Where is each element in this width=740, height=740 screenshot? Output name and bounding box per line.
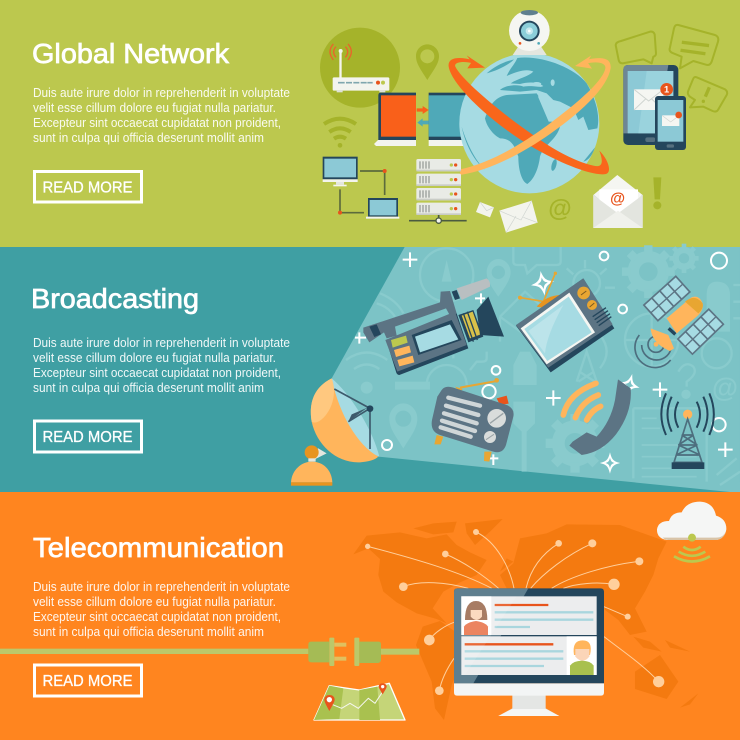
icon: satellite (635, 275, 725, 368)
avatar: man (570, 640, 594, 675)
map dots (365, 529, 664, 695)
illustration: broadcasting icons (291, 244, 740, 493)
text block: telecommunication description (33, 580, 290, 639)
icon: teal laptop (429, 93, 470, 146)
illustration: telecommunication icons (0, 502, 726, 720)
background pattern icons: @ (712, 373, 738, 403)
button: read more: READ MORE (42, 429, 132, 446)
icon: satellite dish (291, 378, 379, 486)
icon: orange laptop (374, 93, 416, 146)
icon: globe (459, 53, 599, 193)
icon: radio (432, 378, 514, 462)
icon: tablet with message (623, 65, 678, 145)
icon: webcam (509, 10, 550, 55)
heading: Broadcasting: Broadcasting (31, 283, 199, 314)
panel: broadcasting (0, 244, 740, 493)
arrow: orange orbit (449, 55, 609, 174)
decoration: plus marks and rings (355, 252, 733, 465)
text block: broadcasting description (33, 336, 290, 395)
text block: global network description: sunt in culpa qui officia deserunt mollit anim (33, 131, 264, 145)
arrow: laptop to laptop (417, 106, 429, 114)
background pattern icons (346, 244, 740, 485)
text block: broadcasting description: velit esse cillum dolore eu fugiat nulla pariatur. (33, 351, 276, 365)
text block: telecommunication description: sunt in culpa qui officia deserunt mollit anim (33, 625, 264, 639)
light beam (332, 247, 740, 493)
icon: cloud with signal (657, 502, 726, 561)
button: read more (34, 421, 142, 452)
text block: broadcasting description: Duis aute irure dolor in reprehenderit in voluptate (33, 336, 290, 350)
icon: at sign: @ (548, 196, 572, 223)
network connection lines (368, 532, 659, 691)
icon: tablet with message: 1 (664, 85, 669, 95)
icon: telephone handset (569, 379, 631, 455)
illustration: global network icons (320, 10, 727, 233)
icon: video camera (363, 278, 504, 375)
icon: power plug (0, 638, 419, 666)
icon: sparkles (529, 269, 643, 474)
text block: global network description: Duis aute irure dolor in reprehenderit in voluptate (33, 86, 290, 100)
world map (353, 519, 698, 720)
icon: location pin (416, 44, 439, 80)
text block: telecommunication description: velit esse cillum dolore eu fugiat nulla pariatur. (33, 595, 276, 609)
icon: wifi (324, 119, 356, 148)
text block: broadcasting description: Excepteur sint occaecat cupidatat non proident, (33, 366, 281, 380)
icon: speech bubbles (616, 25, 727, 112)
text block: telecommunication description: Duis aute irure dolor in reprehenderit in voluptate (33, 580, 290, 594)
avatar: woman (464, 601, 488, 635)
panel: telecommunication (0, 492, 740, 740)
icon: server rack (409, 159, 467, 223)
icon: desktop monitor (454, 588, 604, 716)
icon: broadcast tower (661, 393, 714, 469)
icon: exclamation mark (653, 177, 661, 209)
icon: router in circle (320, 28, 400, 108)
icon: small envelope (476, 202, 494, 217)
icon: retro television (516, 272, 614, 372)
heading: Telecommunication: Telecommunication (33, 532, 284, 563)
heading: Global Network: Global Network (32, 38, 229, 69)
button: read more (34, 665, 142, 696)
icon: open email envelope: @ (610, 191, 625, 208)
button: read more: READ MORE (42, 180, 132, 196)
text block: broadcasting description: sunt in culpa qui officia deserunt mollit anim (33, 381, 264, 395)
text block: global network description: velit esse cillum dolore eu fugiat nulla pariatur. (33, 101, 276, 115)
text block: telecommunication description: Excepteur sint occaecat cupidatat non proident, (33, 610, 281, 624)
text block: global network description (33, 86, 290, 145)
icon: open email envelope (593, 175, 643, 228)
icon: network of computers (323, 157, 399, 219)
button: read more (34, 172, 142, 202)
button: read more: READ MORE (42, 673, 132, 690)
icon: phone with message (655, 96, 686, 150)
arrow: laptop return (417, 118, 429, 127)
arrow: yellow orbit (460, 55, 611, 175)
panel: global network (0, 0, 740, 247)
icon: wifi signal (563, 383, 601, 420)
text block: global network description: Excepteur sint occaecat cupidatat non proident, (33, 116, 281, 130)
icon: folded map (314, 683, 405, 720)
icon: envelope (499, 201, 538, 233)
